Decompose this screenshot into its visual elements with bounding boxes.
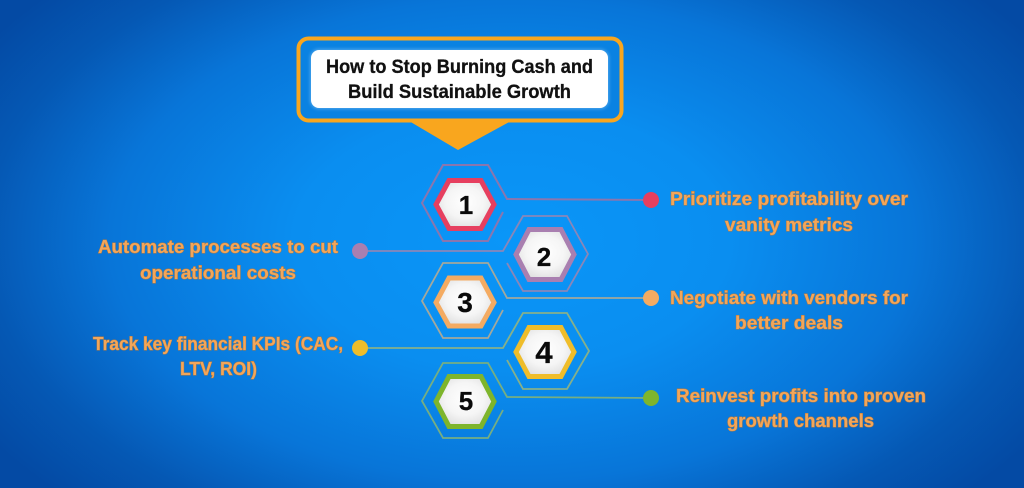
step 4 dot: [352, 340, 368, 356]
step 4 text: [93, 334, 343, 379]
step 1 connector and outer hexagon: [422, 165, 651, 241]
step 4 hexagon: [516, 328, 574, 376]
step 1 dot: [643, 192, 659, 208]
step 3 dot: [643, 290, 659, 306]
title panel: [311, 50, 608, 108]
step 4 text: Track key financial KPIs (CAC,: [93, 334, 343, 354]
step 5 dot: [643, 390, 659, 406]
title callout: [298, 38, 622, 150]
step 4 connector and outer hexagon: [360, 313, 589, 389]
step 1: [422, 165, 908, 241]
step 3: [422, 263, 908, 338]
step 2 hexagon: [516, 230, 574, 280]
step 4 text: LTV, ROI): [180, 359, 257, 379]
step 3 connector and outer hexagon: [422, 263, 651, 338]
step 2 dot: [352, 243, 368, 259]
step 2 number: 2: [537, 242, 551, 272]
step 3 text: better deals: [735, 313, 843, 333]
step 5: [422, 363, 926, 438]
step 4 number: 4: [535, 335, 553, 370]
title: Build Sustainable Growth: [348, 81, 571, 103]
step 3 number: 3: [457, 287, 473, 318]
step 3 hexagon: [436, 278, 494, 326]
step 5 hexagon: [436, 376, 494, 426]
step 2: [98, 216, 588, 291]
step 1 hexagon: [436, 180, 494, 228]
step 2 connector and outer hexagon: [360, 216, 588, 291]
step 2 text: Automate processes to cut: [98, 237, 338, 257]
step 4: [93, 313, 589, 389]
callout frame: [298, 38, 622, 120]
step 5 text: [676, 386, 926, 431]
title: How to Stop Burning Cash and: [326, 56, 593, 78]
step 1 number: 1: [459, 190, 473, 220]
title: [326, 56, 593, 103]
step 1 text: vanity metrics: [725, 215, 853, 235]
callout pointer: [409, 121, 511, 150]
step 1 text: Prioritize profitability over: [670, 189, 908, 209]
step 2 text: [98, 237, 338, 283]
step 2 text: operational costs: [140, 263, 296, 283]
step 1 text: [670, 189, 908, 235]
step 5 connector and outer hexagon: [422, 363, 651, 438]
step 5 text: Reinvest profits into proven: [676, 386, 926, 406]
step 5 number: 5: [459, 386, 473, 416]
step 5 text: growth channels: [727, 411, 874, 431]
step 3 text: Negotiate with vendors for: [670, 288, 908, 308]
step 3 text: [670, 288, 908, 333]
